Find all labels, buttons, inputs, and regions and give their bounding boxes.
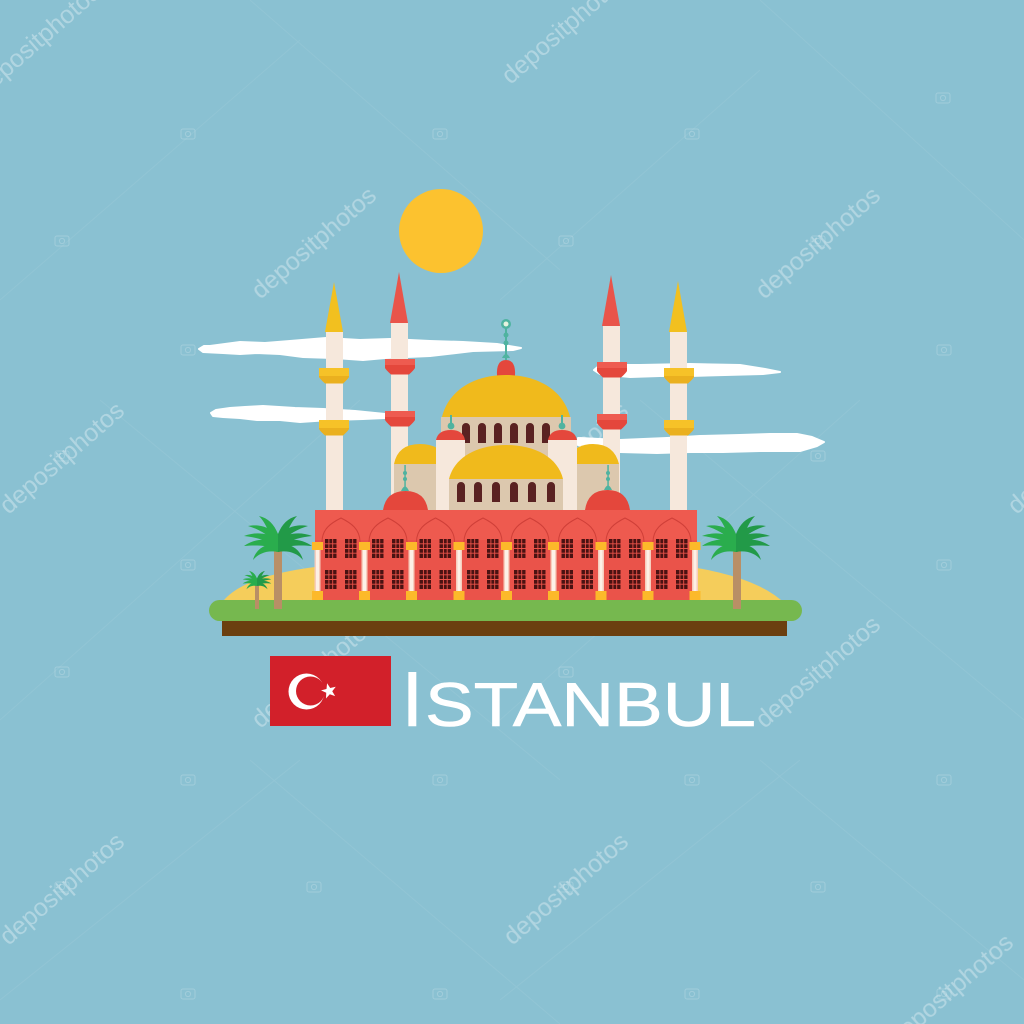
- title: STANBUL: [425, 671, 756, 740]
- side dome right: [577, 444, 619, 510]
- main drum with windows: [441, 417, 571, 477]
- watermark grid: depositphotos: [498, 396, 634, 520]
- icon: Turkish flag: [270, 656, 391, 726]
- minaret: inner left: [385, 272, 415, 510]
- icon: main dome finial: [501, 319, 511, 360]
- icon: palm small left: [243, 571, 271, 609]
- minaret: inner right: [597, 275, 627, 510]
- watermark grid: depositphotos: [750, 610, 886, 734]
- icon: sun: [399, 189, 483, 273]
- small red dome left: [383, 465, 428, 510]
- minaret: far right: [664, 281, 694, 510]
- watermark grid: depositphotos: [750, 181, 886, 305]
- watermark grid: depositphotos: [498, 827, 634, 951]
- main dome: [442, 375, 570, 417]
- main red building: [312, 510, 700, 600]
- watermark grid: depositphotos: [246, 181, 382, 305]
- ground: grass: [209, 600, 802, 621]
- clouds: [199, 338, 824, 453]
- left turret: [436, 415, 465, 510]
- small red dome right: [585, 465, 630, 510]
- side dome left: [394, 444, 437, 510]
- ground: soil: [222, 620, 787, 636]
- icon: palm right: [702, 516, 770, 609]
- front dome: [449, 445, 563, 479]
- icon: palm large left: [244, 516, 312, 609]
- right turret: [548, 415, 577, 510]
- title: I: [402, 655, 423, 743]
- front drum with windows: [449, 479, 563, 510]
- mosque domes and walls: [383, 319, 630, 510]
- ground: sand hills: [224, 567, 781, 600]
- main dome cap: [497, 360, 515, 376]
- title: [402, 655, 756, 743]
- minaret: far left: [319, 282, 349, 510]
- watermark grid: depositphotos: [246, 610, 382, 734]
